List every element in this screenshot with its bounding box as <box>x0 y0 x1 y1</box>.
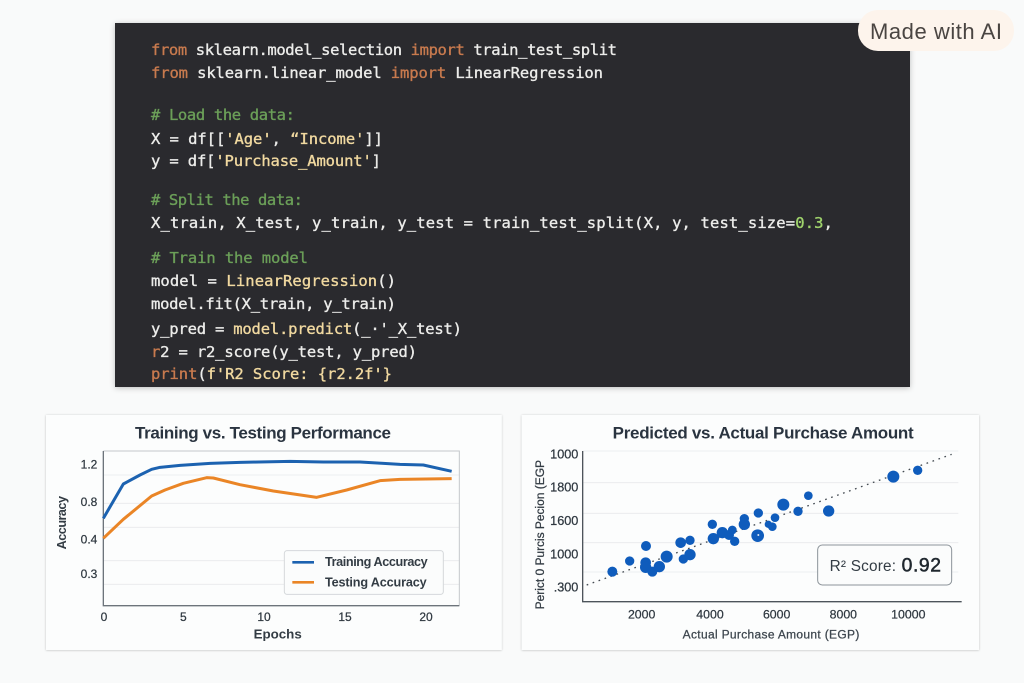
x axis label: Epochs <box>254 626 302 641</box>
x axis label: Actual Purchase Amount (EGP) <box>683 627 859 641</box>
R2 score callout <box>818 545 952 585</box>
axes baseline <box>103 451 459 606</box>
x axis ticks: 4000 <box>696 607 724 621</box>
x axis ticks <box>101 610 433 624</box>
code text block: # Split the data: <box>151 191 303 209</box>
y axis ticks: 0.8 <box>81 495 98 509</box>
badge: Made with AI: Made with AI <box>870 19 1002 44</box>
x axis ticks <box>628 607 926 621</box>
legend: Training Accuracy <box>325 555 428 569</box>
axes frame <box>103 451 459 606</box>
code text block: model.fit(X_train, y_train) <box>151 295 396 313</box>
x axis ticks: 0 <box>101 610 108 624</box>
code text block: print(f'R2 Score: {r2.2f'} <box>151 365 392 383</box>
y axis ticks <box>81 457 98 581</box>
testing accuracy line <box>103 478 452 538</box>
x axis ticks: 10000 <box>891 607 926 621</box>
x axis ticks: 6000 <box>763 607 791 621</box>
y axis ticks: 0.4 <box>81 532 98 546</box>
code text block: model = LinearRegression() <box>151 272 396 290</box>
y axis ticks: .300 <box>554 580 578 594</box>
x axis ticks: 5 <box>180 610 187 624</box>
x axis ticks: 10 <box>257 610 271 624</box>
scatter points <box>607 466 922 577</box>
R2 score callout: 0.92 <box>902 555 941 576</box>
y axis ticks: 1600 <box>550 514 578 528</box>
code text block: r2 = r2_score(y_test, y_pred) <box>151 343 417 361</box>
y axis label: Perict 0 Purcis Pecion (EGP <box>533 460 547 609</box>
y axis ticks: 0.3 <box>81 567 98 581</box>
y axis ticks: 1000 <box>550 547 578 561</box>
chart title: Training vs. Testing Performance <box>135 424 391 443</box>
code text block: y_pred = model.predict(_·'_X_test) <box>151 320 462 338</box>
x axis ticks: 8000 <box>830 607 857 621</box>
badge: Made with AI <box>858 10 1014 51</box>
legend: Testing Accuracy <box>325 575 427 589</box>
y axis ticks: 1800 <box>550 480 578 494</box>
panel: predicted vs actual scatter plot <box>522 415 979 650</box>
panel: training vs testing line chart <box>46 415 502 650</box>
code text block: X = df[['Age', “Income']] <box>151 130 383 148</box>
code text block: # Train the model <box>151 249 308 267</box>
training accuracy line <box>103 461 452 518</box>
trend line <box>587 454 952 585</box>
x axis ticks: 15 <box>338 610 352 624</box>
code text block: X_train, X_test, y_train, y_test = train_test_split(X, y, test_size=0.3, <box>151 214 833 232</box>
chart title: Predicted vs. Actual Purchase Amount <box>613 424 914 443</box>
code text block: y = df['Purchase_Amount'] <box>151 152 381 170</box>
code text block: from sklearn.model_selection import train_test_split <box>151 41 617 59</box>
R2 score callout: R² Score: <box>830 558 896 575</box>
code text block: from sklearn.linear_model import LinearRegression <box>151 64 603 82</box>
legend <box>284 551 443 594</box>
y axis ticks <box>550 447 578 594</box>
panel: code editor <box>115 23 910 387</box>
y axis label: Accuracy <box>55 496 69 549</box>
code text block: # Load the data: <box>151 106 295 124</box>
code text block <box>151 41 833 383</box>
x axis ticks: 20 <box>419 610 433 624</box>
x axis ticks: 2000 <box>628 607 656 621</box>
y axis ticks: 1000 <box>550 447 578 461</box>
axes <box>583 451 962 602</box>
y axis ticks: 1.2 <box>81 457 98 471</box>
